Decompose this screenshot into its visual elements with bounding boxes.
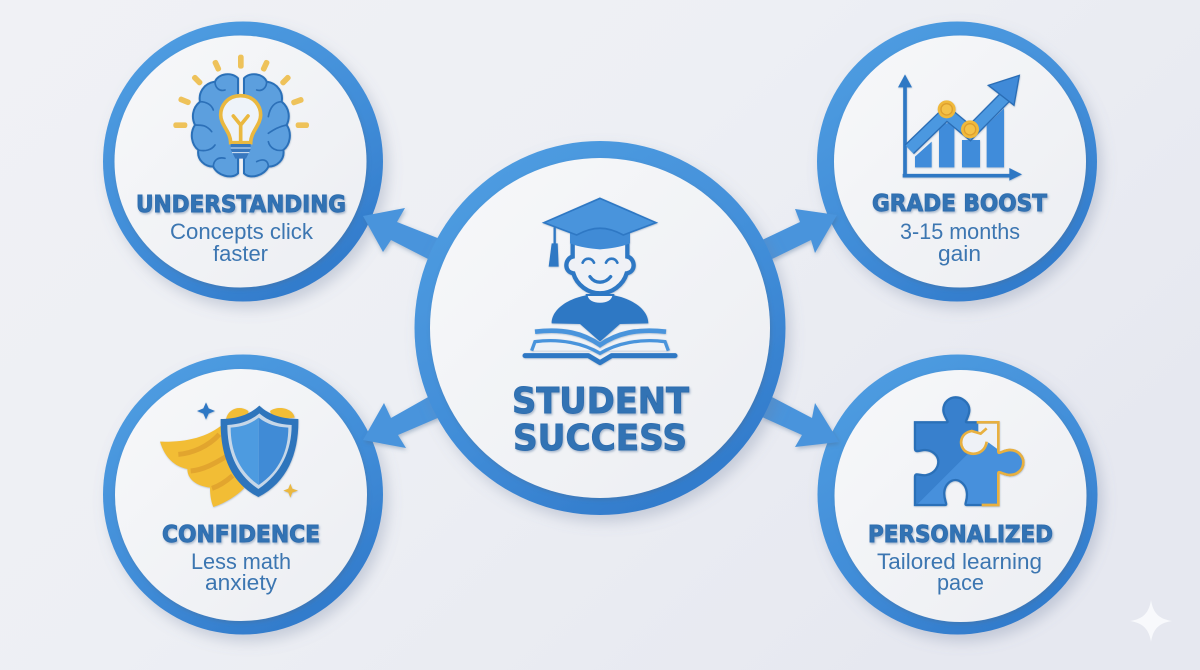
title line 2: SUCCESS xyxy=(513,418,687,459)
heading: PERSONALIZED xyxy=(868,522,1053,548)
icon: shield with cape xyxy=(160,402,298,507)
ring xyxy=(817,22,1097,302)
arrow: center to personalized xyxy=(762,396,839,447)
heading: CONFIDENCE xyxy=(162,522,320,548)
arrow: center to grade boost xyxy=(760,209,837,260)
disc xyxy=(430,158,770,498)
arrow: center to understanding xyxy=(363,208,440,260)
icon: puzzle piece xyxy=(915,397,1023,505)
heading: GRADE BOOST xyxy=(872,191,1047,217)
disc xyxy=(834,370,1086,622)
subtext line 2: gain xyxy=(938,241,981,266)
subtext line 2: anxiety xyxy=(205,570,277,595)
ring xyxy=(414,141,786,515)
panel: student success xyxy=(414,141,786,515)
panel: grade boost xyxy=(817,22,1097,302)
coin 1 xyxy=(938,100,956,118)
subtext line 2: faster xyxy=(213,241,268,266)
panel: personalized xyxy=(818,354,1098,634)
disc xyxy=(114,36,366,288)
ring xyxy=(818,354,1098,634)
lightbulb xyxy=(221,96,261,159)
coin 2 xyxy=(961,120,979,138)
panel: understanding xyxy=(103,22,383,302)
subtext line 1: Less math xyxy=(191,549,291,574)
icon: brain with lightbulb xyxy=(173,55,309,176)
ring xyxy=(103,22,383,302)
disc xyxy=(834,36,1086,288)
blue sparkle xyxy=(197,402,215,420)
ring xyxy=(103,354,383,634)
icon: graduate with book xyxy=(525,198,675,363)
panel: confidence xyxy=(103,354,383,634)
arrow: center to confidence xyxy=(363,396,440,448)
subtext line 1: Tailored learning xyxy=(877,549,1042,574)
icon: watermark sparkle xyxy=(1130,600,1172,642)
subtext line 2: pace xyxy=(937,570,984,595)
title line 1: STUDENT xyxy=(512,381,689,422)
subtext line 1: Concepts click xyxy=(170,219,314,244)
yellow sparkle xyxy=(283,484,298,498)
icon: growth chart xyxy=(898,74,1022,181)
heading: UNDERSTANDING xyxy=(136,192,346,218)
disc xyxy=(115,369,367,621)
subtext line 1: 3-15 months xyxy=(900,219,1020,244)
